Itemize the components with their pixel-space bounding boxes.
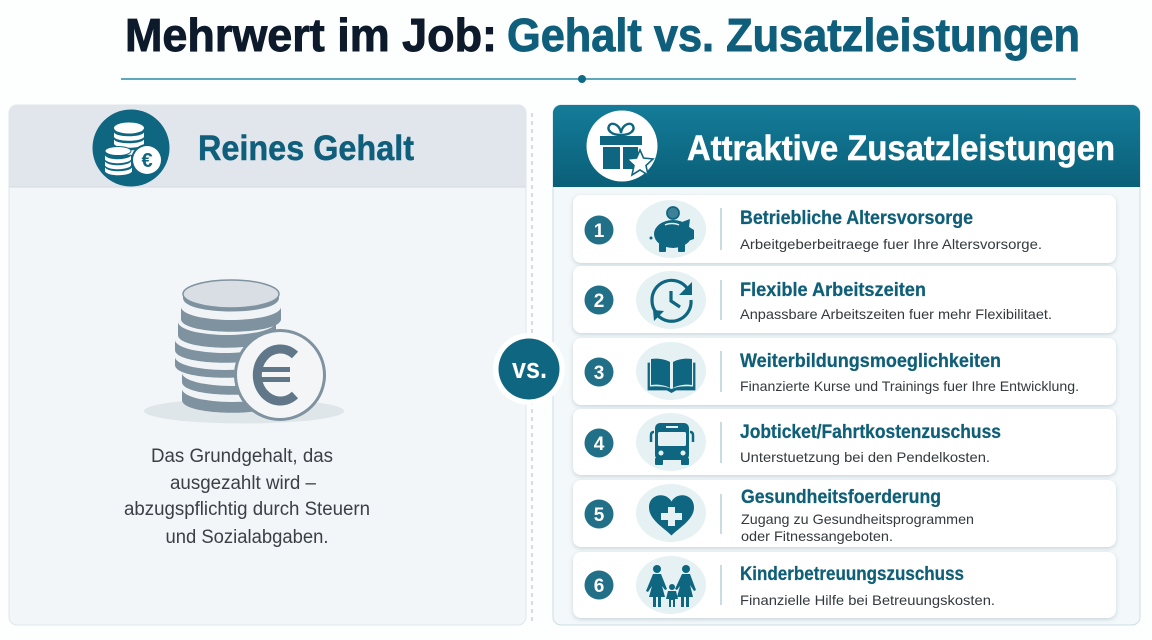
icon: clock with arrows — [636, 271, 706, 329]
card text: Arbeitgeberbeitraege fuer Ihre Altersvorsorge. — [740, 236, 1042, 252]
number 1: 1 — [594, 221, 605, 242]
icon: piggy bank — [636, 200, 706, 258]
panel header: Reines Gehalt — [9, 105, 526, 187]
panel: Attraktive Zusatzleistungen — [553, 105, 1140, 625]
card text: Flexible Arbeitszeiten — [740, 280, 926, 301]
title — [125, 9, 1080, 61]
card text: Finanzierte Kurse und Trainings fuer Ihre Entwicklung. — [740, 378, 1079, 394]
icon: coin stack with euro — [144, 280, 344, 424]
card text — [740, 280, 1052, 322]
number 3: 3 — [594, 363, 604, 384]
card text: Gesundheitsfoerderung — [741, 487, 941, 508]
number 4: 4 — [594, 434, 605, 455]
number 6: 6 — [594, 576, 604, 597]
card text: Finanzielle Hilfe bei Betreuungskosten. — [740, 592, 995, 608]
card text — [741, 487, 974, 544]
card text: Unterstuetzung bei den Pendelkosten. — [740, 449, 990, 465]
card text: Betriebliche Altersvorsorge — [740, 208, 973, 229]
icon: heart with cross — [636, 484, 706, 542]
title: Gehalt vs. Zusatzleistungen — [507, 9, 1080, 61]
card text: Jobticket/Fahrtkostenzuschuss — [740, 422, 1001, 443]
card text: Zugang zu Gesundheitsprogrammen — [741, 511, 974, 527]
text block: description: ausgezahlt wird – — [170, 473, 316, 494]
number 5 — [584, 500, 614, 528]
card text: oder Fitnessangeboten. — [741, 528, 893, 544]
icon: gift with star — [586, 110, 658, 182]
card 5: Gesundheitsfoerderung — [573, 480, 1116, 547]
card text — [740, 564, 995, 608]
number 5: 5 — [594, 505, 605, 526]
card 6: Kinderbetreuungszuschuss — [573, 552, 1116, 618]
number 2 — [584, 286, 614, 314]
number 1 — [584, 216, 614, 244]
title: Mehrwert im Job: — [125, 9, 497, 61]
icon: coins badge — [92, 110, 170, 186]
card text — [740, 422, 1001, 465]
icon: coins badge: € — [141, 150, 153, 172]
number 3 — [584, 358, 614, 386]
text block: description — [124, 446, 370, 548]
panel: Reines Gehalt — [9, 105, 526, 625]
card text: Kinderbetreuungszuschuss — [740, 564, 964, 585]
text block: description: Das Grundgehalt, das — [151, 446, 333, 467]
number 2: 2 — [594, 291, 604, 312]
icon: family — [636, 556, 706, 614]
vs badge — [493, 333, 565, 405]
icon: open book — [636, 342, 706, 400]
number 4 — [584, 428, 614, 458]
panel header: Attraktive Zusatzleistungen — [553, 105, 1140, 187]
vs badge: vs. — [512, 353, 547, 385]
card text — [740, 351, 1079, 394]
card 4: Jobticket/Fahrtkostenzuschuss — [573, 409, 1116, 475]
icon: bus — [636, 413, 706, 471]
text block: description: und Sozialabgaben. — [166, 527, 328, 548]
card 1: Betriebliche Altersvorsorge — [573, 195, 1116, 263]
card text: Weiterbildungsmoeglichkeiten — [740, 351, 1001, 372]
card text: Anpassbare Arbeitszeiten fuer mehr Flexibilitaet. — [740, 306, 1052, 322]
card 2: Flexible Arbeitszeiten — [573, 266, 1116, 333]
number 6 — [584, 570, 614, 600]
text block: description: abzugspflichtig durch Steuern — [124, 499, 370, 520]
heading: Attraktive Zusatzleistungen: Attraktive Zusatzleistungen — [687, 129, 1115, 168]
card 3: Weiterbildungsmoeglichkeiten — [573, 338, 1116, 405]
card text — [740, 208, 1042, 252]
heading: Reines Gehalt: Reines Gehalt — [198, 129, 414, 168]
